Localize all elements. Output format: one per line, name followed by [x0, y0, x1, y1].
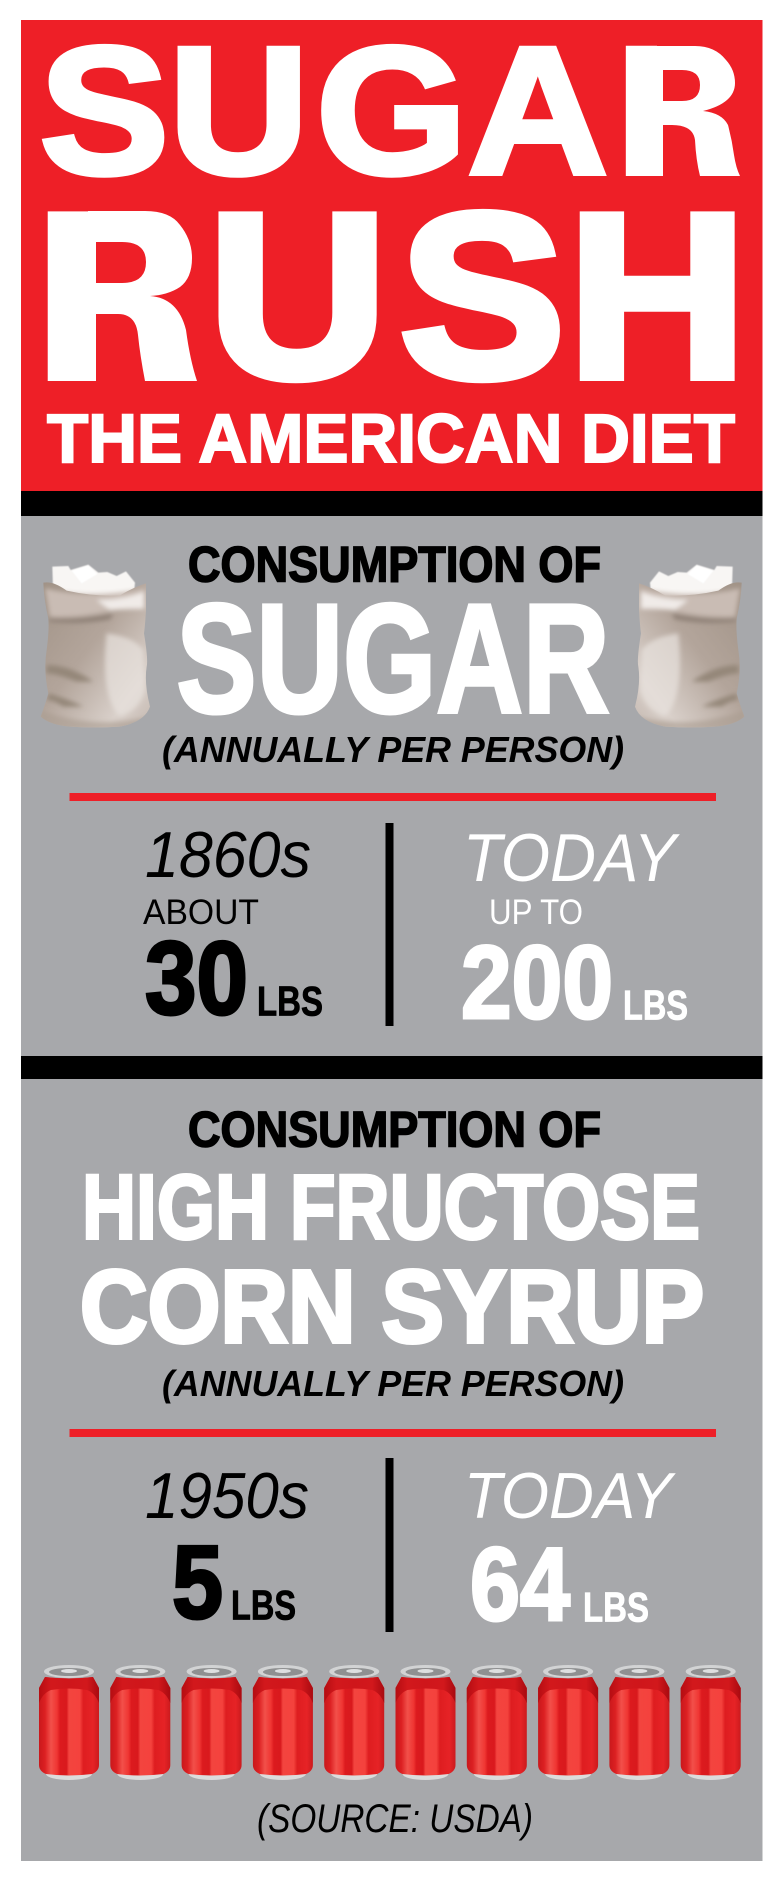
source note: (SOURCE: USDA)	[257, 1797, 533, 1841]
heading: consumption of: CONSUMPTION OF	[188, 536, 601, 592]
stat: 1950s 5 lbs: 1950s	[145, 1459, 309, 1532]
icon: right sugar sack	[635, 565, 745, 730]
stat: today 64 lbs: TODAY	[464, 1459, 676, 1532]
stat: today up to 200 lbs	[461, 820, 688, 1041]
icon: left sugar sack	[40, 565, 150, 730]
title: RUSH: RUSH	[35, 165, 747, 427]
stat: today 64 lbs	[464, 1459, 676, 1643]
stat: 1950s 5 lbs	[145, 1459, 309, 1641]
stat: 1860s about 30 lbs	[143, 818, 323, 1037]
stat: 1860s about 30 lbs: 1860s	[145, 818, 311, 891]
caption: annually per person: (ANNUALLY PER PERSON)	[162, 729, 624, 770]
stat: 1860s about 30 lbs: ABOUT	[143, 893, 259, 932]
stat: 1860s about 30 lbs: 30	[145, 921, 248, 1037]
title: SUGAR: SUGAR	[39, 8, 756, 212]
stat: today up to 200 lbs: UP TO	[489, 893, 583, 932]
heading: sugar: SUGAR	[176, 572, 610, 745]
subtitle: THE AMERICAN DIET	[47, 400, 735, 477]
stat: today 64 lbs: 64	[470, 1527, 570, 1643]
panel: header	[21, 8, 762, 491]
stat: 1950s 5 lbs: LBS	[231, 1582, 296, 1628]
panel: high fructose corn syrup consumption	[21, 1056, 762, 1861]
stat: 1950s 5 lbs: 5	[172, 1525, 223, 1641]
stat: 1860s about 30 lbs: LBS	[257, 978, 323, 1024]
caption: annually per person: (ANNUALLY PER PERSON)	[162, 1363, 624, 1404]
stat: today up to 200 lbs: 200	[461, 925, 613, 1041]
heading: corn syrup: CORN SYRUP	[80, 1249, 704, 1364]
stat: today 64 lbs: LBS	[583, 1584, 649, 1630]
stat: today up to 200 lbs: LBS	[623, 982, 688, 1028]
stat: today up to 200 lbs: TODAY	[463, 820, 680, 896]
icon: row of soda cans	[39, 1665, 741, 1780]
heading: consumption of: CONSUMPTION OF	[188, 1102, 601, 1158]
panel: sugar consumption	[21, 491, 762, 1056]
